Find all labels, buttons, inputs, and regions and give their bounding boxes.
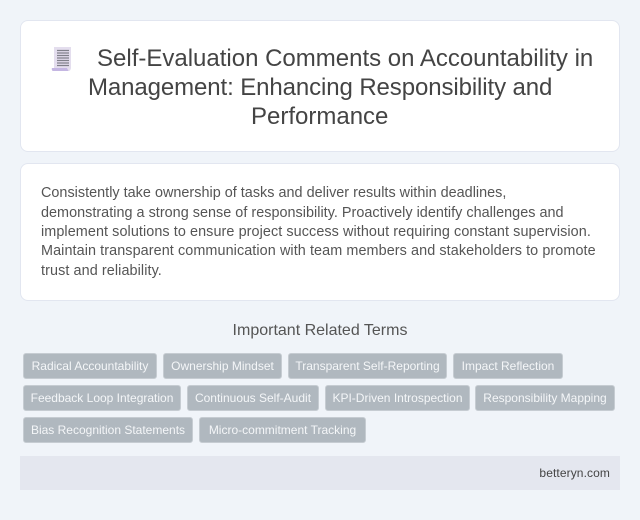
text block: description: trust and reliability. [41,263,162,279]
tag group: related terms: KPI-Driven Introspection [332,391,463,405]
title: Management: Enhancing Responsibility and [88,74,552,101]
tag group: related terms [23,353,615,443]
panel: title card [20,20,620,152]
text block: description [41,185,596,279]
text block: description: demonstrating a strong sense of responsibility. Proactively identify challenges and [41,205,564,221]
tag group: related terms: Continuous Self-Audit [195,391,311,405]
footer source text: betteryn.com [539,466,610,480]
text block: description: Maintain transparent communication with team members and stakeholders to promote [41,243,596,259]
title [88,45,593,130]
tag group: related terms: Radical Accountability [32,359,148,373]
heading: related terms: Important Related Terms [233,322,407,339]
icon: document scroll [52,47,71,71]
title: Self-Evaluation Comments on Accountability in [97,45,593,72]
text block: description: Consistently take ownership of tasks and deliver results within deadlines, [41,185,506,201]
footer bar [20,456,620,490]
title: Performance [251,103,388,130]
tag group: related terms: Responsibility Mapping [483,391,607,405]
tag group: related terms: Bias Recognition Statements [31,423,185,437]
tag group: related terms: Transparent Self-Reporting [295,359,440,373]
tag group: related terms: Micro-commitment Tracking [209,423,356,437]
text block: description: implement solutions to ensure project success without requiring constant supervision. [41,224,591,240]
panel: description card [20,163,620,301]
tag group: related terms: Feedback Loop Integration [31,391,173,405]
tag group: related terms: Impact Reflection [462,359,554,373]
tag group: related terms: Ownership Mindset [171,359,274,373]
